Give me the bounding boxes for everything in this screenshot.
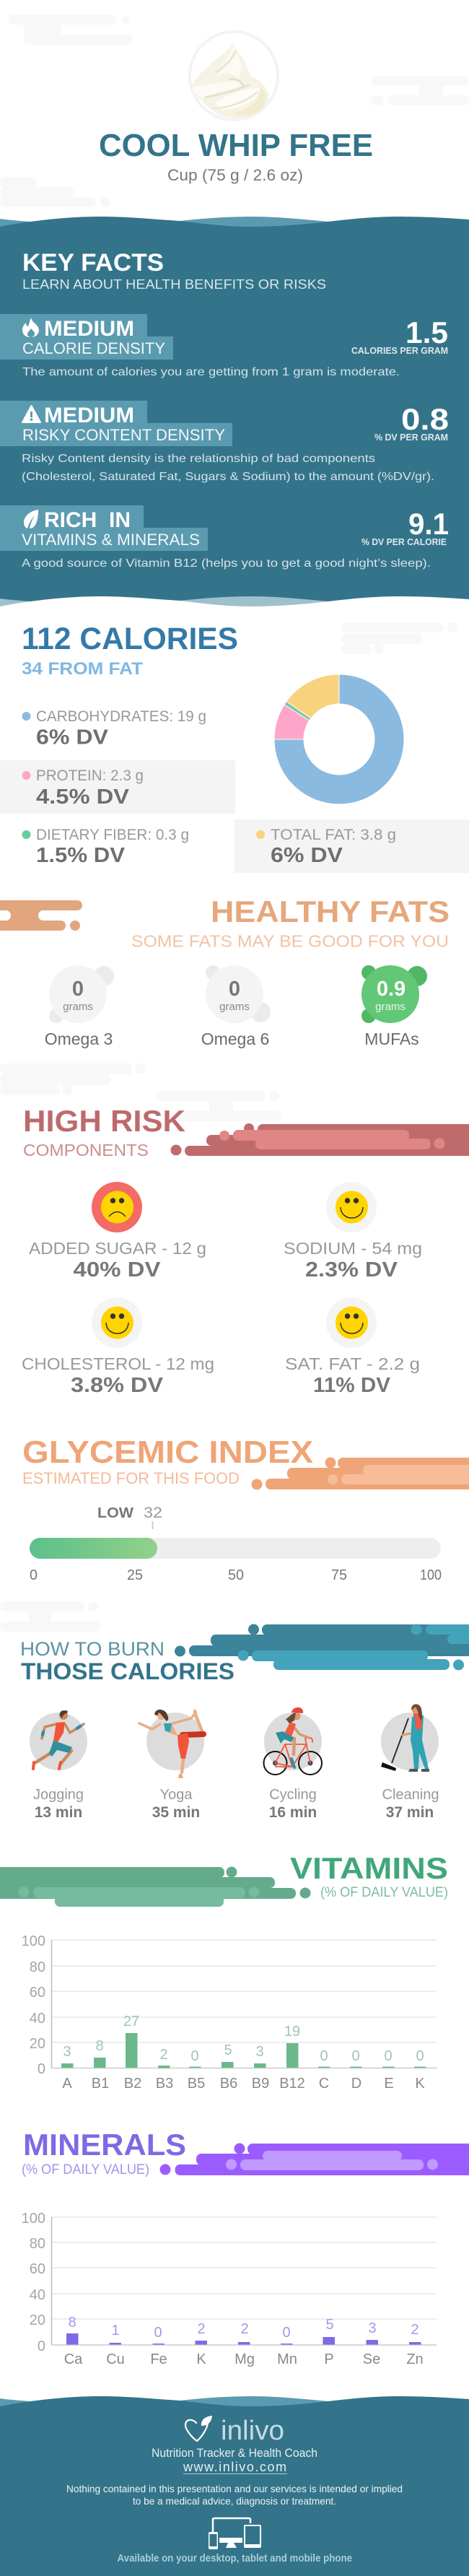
- high risk subheading: COMPONENTS: [23, 1141, 149, 1159]
- vitamins bar chart: B1: [92, 2076, 109, 2092]
- item: saturated fat: [285, 1297, 420, 1397]
- vitamins bar chart: 3: [63, 2044, 71, 2060]
- legend: protein: [0, 760, 235, 814]
- panel: healthy fats: [0, 895, 450, 1048]
- vitamins bar chart: C: [319, 2076, 329, 2092]
- glycemic bar: [30, 1538, 441, 1559]
- item: cholesterol: CHOLESTEROL - 12 mg: [22, 1354, 214, 1373]
- key facts heading: KEY FACTS: [22, 249, 164, 277]
- panel: high risk: [22, 1104, 469, 1397]
- fact: calorie density: The amount of calories you are getting from 1 gram is moderate.: [22, 366, 400, 378]
- vitamins bar chart: 60: [30, 1985, 45, 2001]
- activity labels: 35 min: [152, 1804, 200, 1821]
- vitamins bar chart: B12: [279, 2076, 305, 2092]
- item: saturated fat: SAT. FAT - 2.2 g: [285, 1354, 420, 1373]
- vitamins bar chart: 27: [123, 2014, 139, 2029]
- omega 3: 0: [72, 978, 84, 1001]
- fact: risky content density: RISKY CONTENT DENSITY: [22, 426, 225, 444]
- vitamins bar chart: B9: [252, 2076, 269, 2092]
- activity labels: 13 min: [35, 1804, 82, 1821]
- minerals bar chart: 8: [68, 2315, 76, 2331]
- heading decoration: [175, 1624, 469, 1671]
- glycemic scale: 50: [228, 1567, 244, 1583]
- item: cholesterol: [22, 1297, 214, 1397]
- glycemic scale: 75: [331, 1567, 347, 1583]
- availability note: Available on your desktop, tablet and mobile phone: [117, 2553, 352, 2564]
- activity labels: [33, 1787, 439, 1821]
- legend: protein: 4.5% DV: [36, 786, 130, 809]
- minerals bar chart: 2: [240, 2321, 249, 2337]
- omega 3: grams: [63, 1001, 93, 1013]
- activity: jogging: [30, 1710, 87, 1770]
- donut chart: [274, 674, 404, 804]
- vitamins bar chart: 40: [30, 2011, 45, 2027]
- omega 6: 0: [229, 978, 240, 1001]
- glycemic scale: 25: [127, 1567, 143, 1583]
- legend: carbohydrates: CARBOHYDRATES: 19 g: [36, 708, 206, 725]
- omega 6: grams: [219, 1001, 250, 1013]
- fact: vitamins and minerals: [0, 505, 449, 570]
- serving size: Cup (75 g / 2.6 oz): [167, 166, 303, 184]
- vitamins bar chart: 100: [22, 1933, 45, 1949]
- fact: calorie density: MEDIUM: [44, 317, 134, 341]
- vitamins bar chart: 0: [38, 2061, 45, 2077]
- vitamins bar chart: B6: [220, 2076, 237, 2092]
- minerals bar chart: 20: [30, 2312, 45, 2328]
- vitamins bar chart: 8: [95, 2038, 104, 2054]
- vitamins bar chart: K: [415, 2076, 425, 2092]
- minerals bar chart: Cu: [106, 2351, 125, 2367]
- activity: cycling: [264, 1707, 322, 1775]
- minerals bar chart: P: [324, 2351, 334, 2367]
- fact: risky content density: (Cholesterol, Saturated Fat, Sugars & Sodium) to the amount (%DV/gr).: [22, 471, 434, 483]
- minerals bar chart: 3: [368, 2320, 377, 2336]
- item: sodium: 2.3% DV: [305, 1258, 398, 1282]
- item: added sugar: 40% DV: [74, 1258, 161, 1282]
- tagline: Nutrition Tracker & Health Coach: [152, 2446, 317, 2460]
- vitamins bar chart: 80: [30, 1959, 45, 1975]
- title: COOL WHIP FREE: [99, 128, 373, 163]
- omega 3: [45, 965, 114, 1048]
- vitamins bar chart: B3: [156, 2076, 173, 2092]
- mufas: 0.9: [377, 978, 406, 1001]
- vitamins bar chart: 2: [159, 2047, 168, 2063]
- mufas: [361, 965, 427, 1048]
- burn heading light: HOW TO BURN: [20, 1638, 165, 1660]
- vitamins bar chart: A: [62, 2076, 72, 2092]
- vitamins bar chart: 0: [384, 2048, 393, 2064]
- vitamins bar chart: 0: [320, 2048, 328, 2064]
- wave top: [0, 217, 469, 232]
- vitamins bar chart: [22, 1933, 437, 2092]
- background cloud shapes: [0, 14, 469, 1632]
- legend: total fat: 6% DV: [271, 844, 343, 867]
- burn heading bold: THOSE CALORIES: [21, 1658, 234, 1684]
- panel: burn calories: [20, 1624, 469, 1821]
- minerals bar chart: 100: [22, 2211, 45, 2227]
- vitamins bar chart: 20: [30, 2036, 45, 2052]
- glycemic index subheading: ESTIMATED FOR THIS FOOD: [22, 1469, 240, 1487]
- minerals bar chart: 5: [325, 2317, 334, 2333]
- glycemic scale: 100: [420, 1567, 442, 1583]
- vitamins subheading: (% OF DAILY VALUE): [320, 1885, 448, 1900]
- fact: risky content density: Risky Content density is the relationship of bad components: [22, 453, 375, 465]
- legend: carbohydrates: 6% DV: [36, 726, 109, 749]
- vitamins bar chart: B5: [188, 2076, 205, 2092]
- minerals bar chart: 60: [30, 2261, 45, 2277]
- legend: total fat: [234, 819, 469, 873]
- activity: cleaning: [381, 1704, 439, 1772]
- heading decoration: [0, 1867, 310, 1907]
- legend: dietary fiber: DIETARY FIBER: 0.3 g: [36, 827, 189, 843]
- vitamins bar chart: 5: [224, 2042, 232, 2058]
- wave bottom: [0, 596, 469, 612]
- omega 6: Omega 6: [201, 1030, 269, 1048]
- panel: glycemic index: [22, 1435, 469, 1583]
- item: sodium: SODIUM - 54 mg: [284, 1239, 422, 1258]
- vitamins bar chart: 19: [284, 2024, 300, 2040]
- vitamins bar chart: D: [351, 2076, 361, 2092]
- item: saturated fat: 11% DV: [313, 1374, 391, 1397]
- disclaimer: to be a medical advice, diagnosis or treatment.: [133, 2495, 336, 2507]
- glycemic value: 32: [144, 1505, 162, 1521]
- panel: key facts: [0, 217, 469, 612]
- minerals bar chart: K: [196, 2351, 206, 2367]
- minerals subheading: (% OF DAILY VALUE): [22, 2162, 149, 2177]
- activity labels: Jogging: [33, 1787, 84, 1803]
- legend: dietary fiber: [22, 827, 189, 867]
- calories from fat: 34 FROM FAT: [22, 659, 143, 679]
- omega 3: Omega 3: [45, 1030, 113, 1048]
- icon: flame: [22, 318, 39, 337]
- vitamins bar chart: 0: [351, 2048, 360, 2064]
- glycemic scale: 0: [30, 1567, 38, 1583]
- item: sodium: [284, 1182, 422, 1282]
- minerals bar chart: 0: [154, 2325, 162, 2341]
- healthy fats heading: HEALTHY FATS: [211, 895, 450, 928]
- item: added sugar: ADDED SUGAR - 12 g: [29, 1239, 206, 1258]
- fact: calorie density: 1.5: [406, 316, 448, 349]
- icon: devices: [209, 2518, 261, 2549]
- minerals bar chart: Mg: [234, 2351, 255, 2367]
- minerals bar chart: 0: [282, 2325, 291, 2341]
- heading decoration: [160, 2143, 469, 2175]
- activity labels: Yoga: [160, 1787, 193, 1803]
- legend: total fat: TOTAL FAT: 3.8 g: [271, 827, 396, 843]
- healthy fats subheading: SOME FATS MAY BE GOOD FOR YOU: [131, 931, 449, 950]
- activity labels: Cycling: [269, 1787, 317, 1803]
- minerals bar chart: Se: [363, 2351, 380, 2367]
- minerals bar chart: Zn: [406, 2351, 424, 2367]
- vitamins bar chart: 0: [416, 2048, 424, 2064]
- fact: calorie density: [0, 314, 448, 378]
- activity: yoga: [139, 1710, 204, 1778]
- glycemic index heading: GLYCEMIC INDEX: [22, 1435, 313, 1470]
- fact: vitamins and minerals: VITAMINS & MINERALS: [22, 531, 200, 549]
- vitamins bar chart: B2: [124, 2076, 141, 2092]
- activity labels: Cleaning: [382, 1787, 439, 1803]
- mufas: MUFAs: [364, 1030, 419, 1048]
- mufas: grams: [375, 1001, 406, 1013]
- minerals bar chart: 2: [411, 2322, 419, 2338]
- logo: inlivo: [221, 2416, 284, 2446]
- icon: leaf: [24, 510, 38, 528]
- omega 6: [201, 965, 271, 1048]
- fact: calorie density: CALORIES PER GRAM: [351, 345, 448, 356]
- glycemic value: LOW: [97, 1505, 133, 1521]
- minerals bar chart: Mn: [277, 2351, 297, 2367]
- fact: vitamins and minerals: 9.1: [408, 507, 449, 541]
- key facts subheading: LEARN ABOUT HEALTH BENEFITS OR RISKS: [22, 277, 326, 292]
- fact: risky content density: MEDIUM: [44, 404, 134, 427]
- item: cholesterol: 3.8% DV: [71, 1374, 164, 1397]
- food photo: whipped cream: [190, 32, 278, 120]
- legend: dietary fiber: 1.5% DV: [36, 844, 126, 867]
- heading decoration: [170, 1123, 469, 1156]
- fact: vitamins and minerals: RICH IN: [44, 508, 131, 532]
- fact: vitamins and minerals: A good source of Vitamin B12 (helps you to get a good night’s sleep).: [22, 557, 431, 570]
- minerals bar chart: Ca: [64, 2351, 83, 2367]
- fact: vitamins and minerals: % DV PER CALORIE: [361, 536, 447, 547]
- legend: protein: PROTEIN: 2.3 g: [36, 767, 144, 784]
- fact: risky content density: 0.8: [401, 402, 449, 436]
- glycemic scale: [30, 1567, 442, 1583]
- minerals heading: MINERALS: [23, 2128, 186, 2162]
- fact: risky content density: % DV PER GRAM: [374, 432, 448, 443]
- logo: [185, 2416, 284, 2446]
- footer wave: [0, 2396, 469, 2411]
- fact: calorie density: CALORIE DENSITY: [22, 339, 165, 357]
- vitamins bar chart: E: [384, 2076, 394, 2092]
- legend: carbohydrates: [22, 708, 206, 749]
- glycemic value: [97, 1505, 162, 1529]
- calories heading: 112 CALORIES: [22, 622, 238, 656]
- minerals bar chart: 40: [30, 2287, 45, 2303]
- icon: warning: [22, 406, 40, 422]
- vitamins bar chart: 0: [190, 2048, 199, 2064]
- disclaimer: Nothing contained in this presentation and our services is intended or implied: [66, 2483, 403, 2494]
- activity labels: 16 min: [269, 1804, 317, 1821]
- minerals bar chart: Fe: [150, 2351, 167, 2367]
- panel: calories: [0, 622, 469, 873]
- fact: risky content density: [0, 401, 449, 483]
- minerals bar chart: 1: [111, 2323, 120, 2338]
- high risk heading: HIGH RISK: [23, 1104, 185, 1138]
- vitamins bar chart: 3: [255, 2044, 264, 2060]
- minerals bar chart: [22, 2211, 437, 2367]
- heading decoration: [251, 1457, 469, 1490]
- minerals bar chart: 2: [197, 2321, 206, 2337]
- disclaimer: [66, 2483, 403, 2507]
- minerals bar chart: 80: [30, 2236, 45, 2252]
- activity labels: 37 min: [386, 1804, 434, 1821]
- item: added sugar: [29, 1182, 206, 1282]
- website: www.inlivo.com: [183, 2460, 286, 2474]
- panel: footer: [0, 2396, 469, 2576]
- vitamins heading: VITAMINS: [290, 1851, 448, 1885]
- panel: minerals: [22, 2128, 469, 2367]
- minerals bar chart: 0: [38, 2338, 45, 2354]
- heading decoration: [0, 900, 82, 931]
- panel: vitamins: [0, 1851, 448, 2092]
